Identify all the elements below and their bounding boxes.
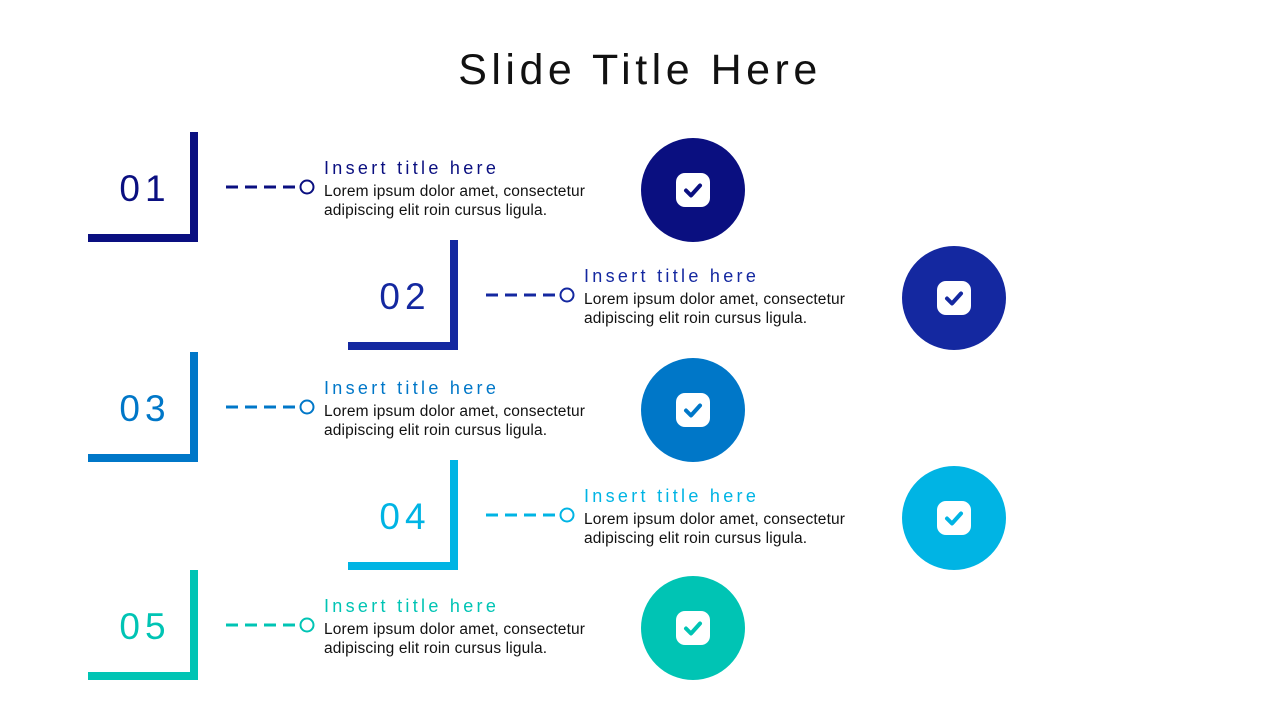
connector 04 bbox=[486, 508, 574, 522]
icon circle 03 bbox=[641, 358, 745, 462]
number 01: 01 bbox=[119, 168, 171, 209]
bracket 05 bbox=[88, 570, 198, 680]
step 01 bbox=[88, 132, 745, 242]
text 03: Insert title here bbox=[324, 378, 499, 398]
bracket 01 bbox=[88, 132, 198, 242]
text 01: Lorem ipsum dolor amet, consectetur bbox=[324, 183, 585, 200]
text 05 bbox=[324, 596, 585, 657]
text 05: Insert title here bbox=[324, 596, 499, 616]
icon circle 02 bbox=[902, 246, 1006, 350]
bracket 02 bbox=[348, 240, 458, 350]
title: Slide Title Here bbox=[458, 46, 822, 94]
text 03: adipiscing elit roin cursus ligula. bbox=[324, 422, 547, 439]
text 02: Lorem ipsum dolor amet, consectetur bbox=[584, 291, 845, 308]
text 04 bbox=[584, 486, 845, 547]
text 01: Insert title here bbox=[324, 158, 499, 178]
connector 02 bbox=[486, 288, 574, 302]
step 04 bbox=[348, 460, 1006, 570]
text 05: Lorem ipsum dolor amet, consectetur bbox=[324, 621, 585, 638]
connector 05 bbox=[226, 618, 314, 632]
number 04: 04 bbox=[379, 496, 431, 537]
text 01 bbox=[324, 158, 585, 219]
connector 03 bbox=[226, 400, 314, 414]
text 05: adipiscing elit roin cursus ligula. bbox=[324, 640, 547, 657]
text 04: Lorem ipsum dolor amet, consectetur bbox=[584, 511, 845, 528]
text 02: Insert title here bbox=[584, 266, 759, 286]
text 02 bbox=[584, 266, 845, 327]
number 05: 05 bbox=[119, 606, 171, 647]
text 01: adipiscing elit roin cursus ligula. bbox=[324, 202, 547, 219]
text 02: adipiscing elit roin cursus ligula. bbox=[584, 310, 807, 327]
icon circle 01 bbox=[641, 138, 745, 242]
text 04: Insert title here bbox=[584, 486, 759, 506]
text 04: adipiscing elit roin cursus ligula. bbox=[584, 530, 807, 547]
bracket 04 bbox=[348, 460, 458, 570]
text 03: Lorem ipsum dolor amet, consectetur bbox=[324, 403, 585, 420]
icon circle 04 bbox=[902, 466, 1006, 570]
bracket 03 bbox=[88, 352, 198, 462]
icon circle 05 bbox=[641, 576, 745, 680]
number 03: 03 bbox=[119, 388, 171, 429]
connector 01 bbox=[226, 180, 314, 194]
number 02: 02 bbox=[379, 276, 431, 317]
step 02 bbox=[348, 240, 1006, 350]
step 05 bbox=[88, 570, 745, 680]
step 03 bbox=[88, 352, 745, 462]
text 03 bbox=[324, 378, 585, 439]
